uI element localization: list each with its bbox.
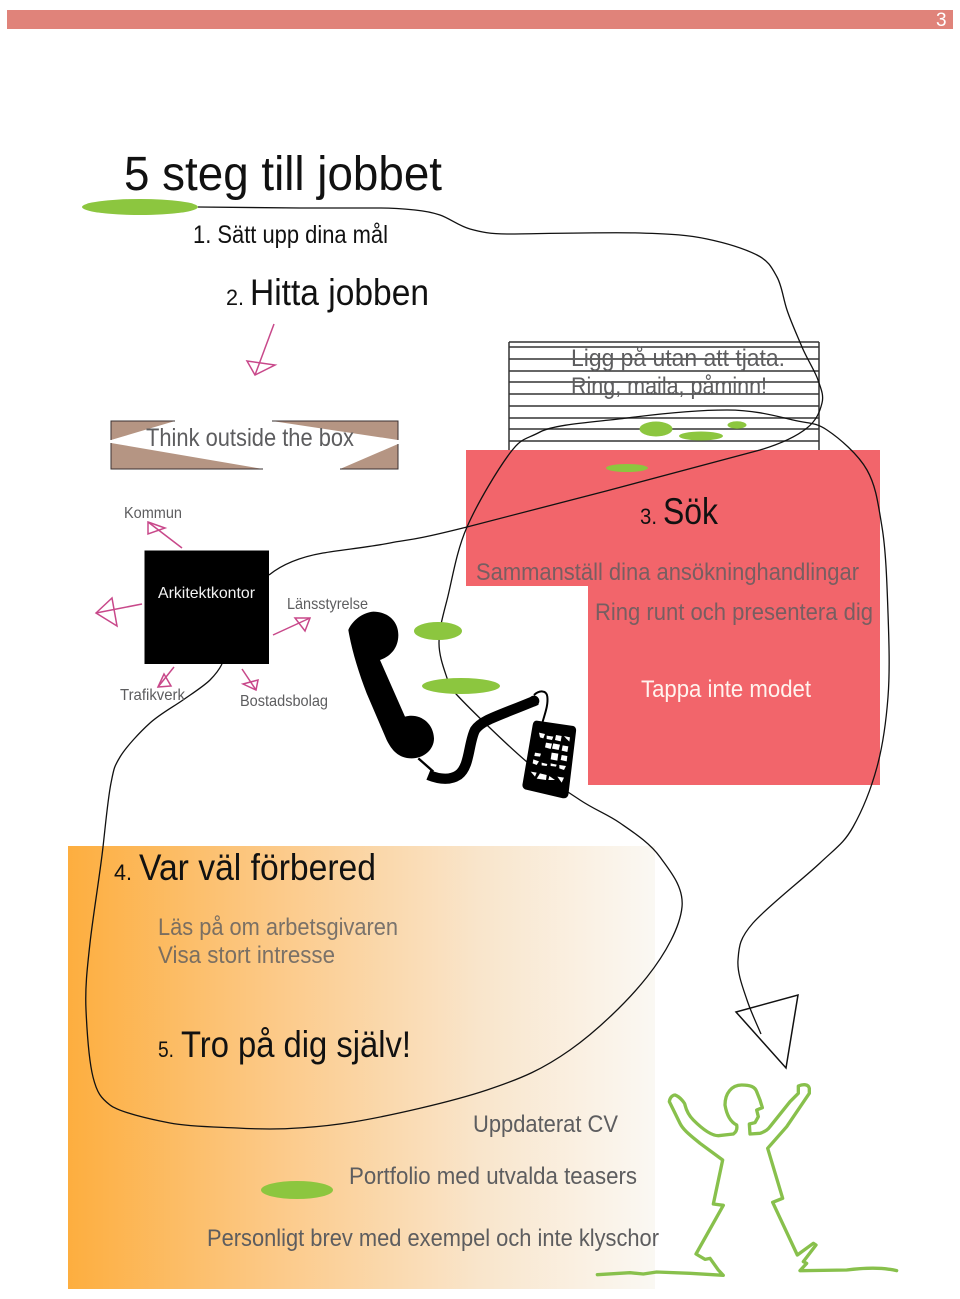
step 5 heading: Tro på dig själv! xyxy=(181,1024,411,1065)
icon: telephone xyxy=(348,612,576,798)
label: Kommun: Kommun xyxy=(124,505,182,522)
step 2 heading: 2. xyxy=(226,285,244,310)
text: read about employer: Läs på om arbetsgivaren xyxy=(158,914,398,941)
step 3 heading: Sök xyxy=(663,491,718,532)
step 4 heading: Var väl förbered xyxy=(139,847,376,888)
arrow: to Bostadsbolag xyxy=(242,669,258,690)
arrow: to Kommun xyxy=(148,522,182,548)
panel: prepare, gradient xyxy=(68,846,655,1289)
step 4 heading: 4. xyxy=(114,860,132,885)
text: think outside: Think outside the box xyxy=(146,424,354,452)
label: Bostadsbolag: Bostadsbolag xyxy=(240,693,328,710)
label: Länsstyrelse: Länsstyrelse xyxy=(287,596,368,613)
text: call and remind: Ring, maila, påminn! xyxy=(571,373,767,400)
black box: Arkitektkontor xyxy=(144,550,269,664)
arrow: down to box xyxy=(247,324,275,375)
step 2 heading: Hitta jobben xyxy=(250,272,429,313)
arrow: to Länsstyrelse xyxy=(273,618,310,635)
box: think outside the box xyxy=(111,421,398,469)
arrow: to Trafikverk xyxy=(158,667,174,687)
panel: lined note paper xyxy=(509,342,819,450)
text: portfolio: Portfolio med utvalda teasers xyxy=(349,1163,637,1190)
step 1: 1. Sätt upp dina mål xyxy=(193,221,388,249)
black winding route line xyxy=(86,207,889,1129)
step 3 heading: 3. xyxy=(640,504,657,529)
green spots xyxy=(82,199,746,1199)
arrowhead triangle xyxy=(736,995,798,1068)
page number: 3 xyxy=(936,10,947,31)
text: follow up: Ligg på utan att tjata. xyxy=(571,345,785,372)
step 3 heading xyxy=(640,491,718,532)
label: Trafikverk: Trafikverk xyxy=(120,687,186,704)
panel: search, red xyxy=(466,450,880,785)
text: personal letter: Personligt brev med exempel och inte klyschor xyxy=(207,1225,659,1252)
arrow: to left xyxy=(96,598,142,626)
black box: Arkitektkontor: Arkitektkontor xyxy=(158,585,256,602)
text: keep courage: Tappa inte modet xyxy=(641,676,811,703)
step 5 heading: 5. xyxy=(158,1037,174,1062)
title: 5 steg till jobbet xyxy=(124,148,442,201)
text: show interest: Visa stort intresse xyxy=(158,942,335,969)
header bar xyxy=(7,10,953,31)
org diagram xyxy=(96,505,368,710)
icon: cheering figure xyxy=(597,1085,897,1275)
text: call around: Ring runt och presentera dig xyxy=(595,599,873,626)
text: compile applications: Sammanställ dina ansökninghandlingar xyxy=(476,559,859,586)
text: updated CV: Uppdaterat CV xyxy=(473,1111,618,1138)
